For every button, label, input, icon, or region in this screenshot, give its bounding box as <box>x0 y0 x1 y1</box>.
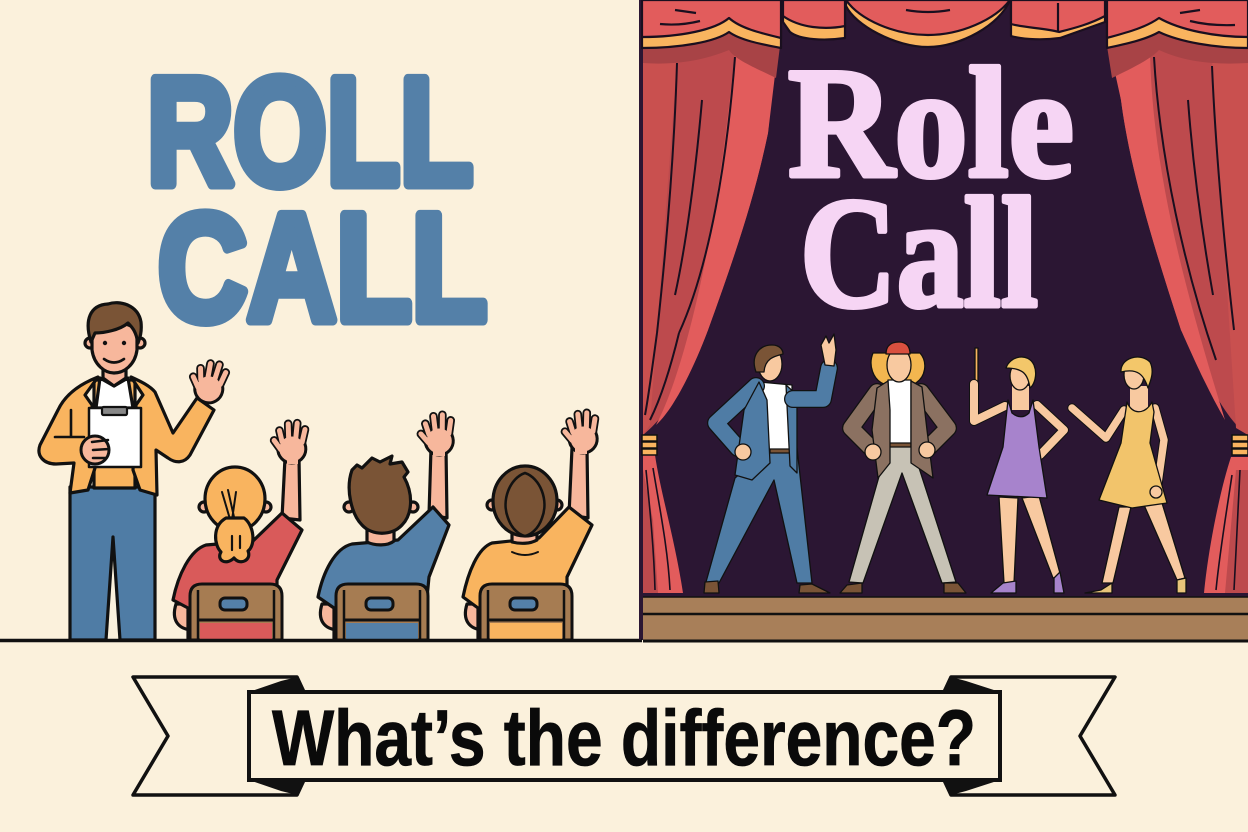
shirt <box>96 378 133 408</box>
banner right tail <box>944 677 1115 795</box>
valance <box>642 0 1248 48</box>
teacher raised hand <box>188 359 229 406</box>
teacher face details <box>103 341 126 345</box>
ears <box>85 338 95 348</box>
banner folds <box>249 677 1000 795</box>
student: red shirt <box>173 458 302 640</box>
title: Role Call: Role <box>788 36 1074 211</box>
actor: woman in purple dress <box>974 348 1064 593</box>
student hand red <box>273 422 307 463</box>
student: orange shirt <box>463 448 592 640</box>
face <box>92 322 137 373</box>
panel: roll call <box>39 47 598 640</box>
stage floor <box>643 597 1248 641</box>
teacher holding hand <box>81 436 109 464</box>
sweater <box>94 380 135 488</box>
trousers <box>70 487 155 640</box>
student chair red <box>190 584 282 640</box>
sleeves <box>851 392 948 447</box>
student chair blue <box>336 584 428 640</box>
divider and ground line <box>0 639 642 642</box>
dress <box>1099 402 1167 508</box>
jacket torso <box>872 381 890 478</box>
arms <box>1072 408 1164 490</box>
banner main ribbon <box>249 692 1000 780</box>
panel: role call stage <box>640 0 1248 641</box>
student: blue shirt <box>318 448 449 640</box>
jacket torso <box>735 382 770 480</box>
actor: woman in yellow dress <box>1072 357 1186 593</box>
teacher figure <box>39 303 214 640</box>
raised sleeve <box>793 368 829 399</box>
banner text: What’s the difference? <box>272 693 976 782</box>
title: ROLL CALL: ROLL <box>147 47 473 217</box>
jacket right <box>131 377 214 495</box>
trousers <box>706 448 812 583</box>
actor: man in blue suit <box>704 334 836 593</box>
title: Role Call <box>788 36 1074 341</box>
neck <box>1012 386 1029 410</box>
student hand blue <box>420 414 454 456</box>
left curtain tieback <box>642 435 657 455</box>
hair <box>88 303 141 343</box>
right curtain <box>1107 30 1248 593</box>
dress <box>987 400 1047 498</box>
left curtain <box>642 30 780 593</box>
arms <box>974 384 1064 455</box>
banner: What's the difference? <box>133 677 1115 795</box>
banner left tail <box>133 677 304 795</box>
student hand orange <box>564 413 598 454</box>
student chair orange <box>480 584 572 640</box>
jacket left <box>39 377 98 493</box>
title: ROLL CALL <box>147 47 487 353</box>
clipboard <box>89 408 141 467</box>
shirt <box>760 382 793 451</box>
neck <box>103 362 126 386</box>
actor: man in brown jacket <box>840 342 966 593</box>
title: ROLL CALL: CALL <box>158 183 487 353</box>
right curtain tieback <box>1232 435 1248 455</box>
title: Role Call: Call <box>800 166 1038 341</box>
left sleeve <box>716 386 756 448</box>
shoes <box>704 581 719 593</box>
